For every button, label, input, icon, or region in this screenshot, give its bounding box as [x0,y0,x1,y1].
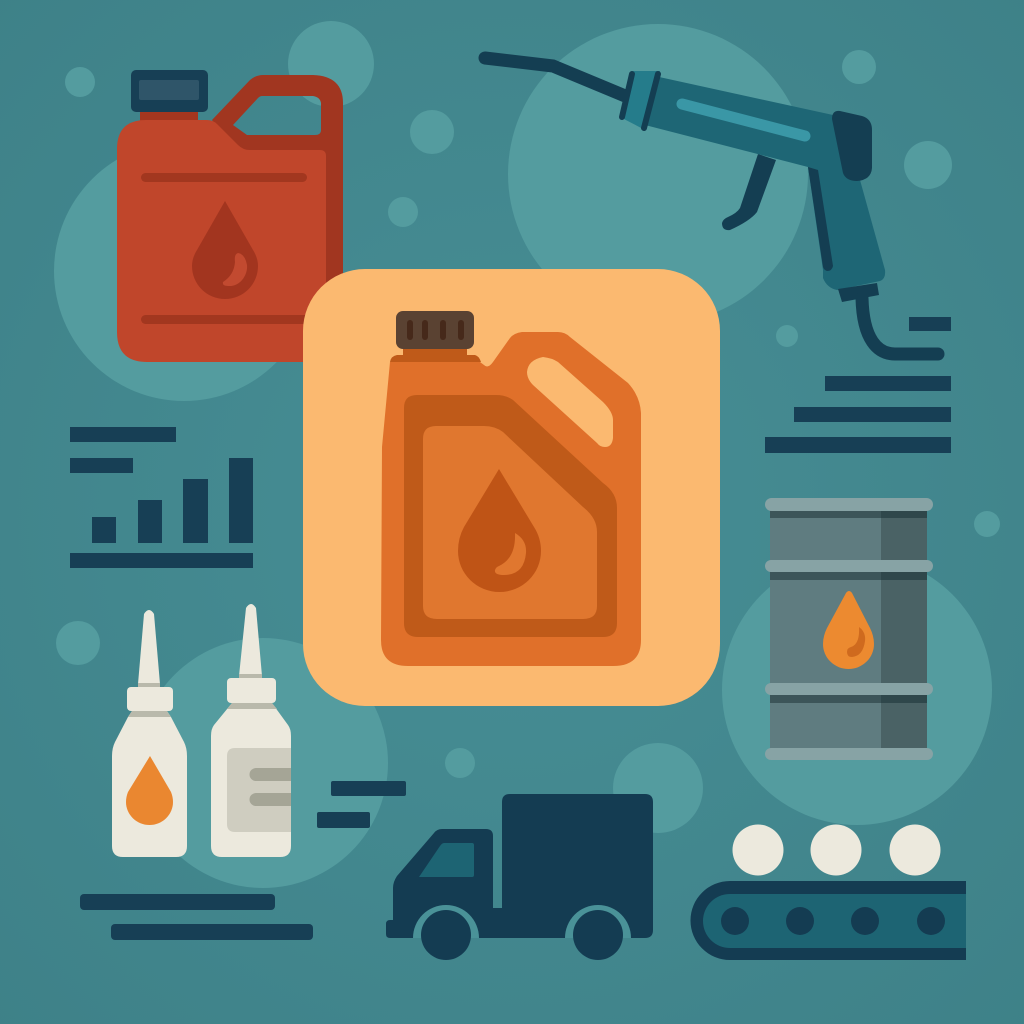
cab window [419,843,474,877]
lines bottom left [80,781,406,940]
right bottle [211,604,291,857]
lines top right [765,317,951,453]
items [732,824,940,876]
nozzle [485,58,630,98]
cap [131,70,208,122]
rims [765,498,933,760]
caulking gun [485,58,938,354]
left bottle [112,610,187,857]
collar [622,71,660,130]
handle [212,75,343,300]
steel barrel [765,498,933,760]
jug body [381,332,641,666]
brown cap [396,311,474,349]
central panel [303,269,720,706]
delivery truck [386,794,653,960]
bar chart [70,427,253,568]
grip strip [808,167,833,271]
body [117,120,326,362]
stripes [141,173,307,182]
orange jug [381,311,641,666]
wheels [413,905,631,960]
grip and barrel [645,75,885,290]
head [832,111,872,181]
red jerrycan [117,70,343,362]
trigger [722,154,776,230]
background circles [54,21,1000,888]
glue bottles [112,604,291,857]
drop [192,201,258,299]
shoulder and neck [390,349,481,362]
drop [823,591,874,669]
label inner [423,426,597,619]
barrel highlight [682,104,805,136]
hose [862,298,938,354]
conveyor belt [690,824,966,960]
base cap [838,283,879,302]
label dark border [404,395,617,637]
handle opening [527,357,613,447]
collar bands [622,74,658,128]
drop [458,469,541,592]
